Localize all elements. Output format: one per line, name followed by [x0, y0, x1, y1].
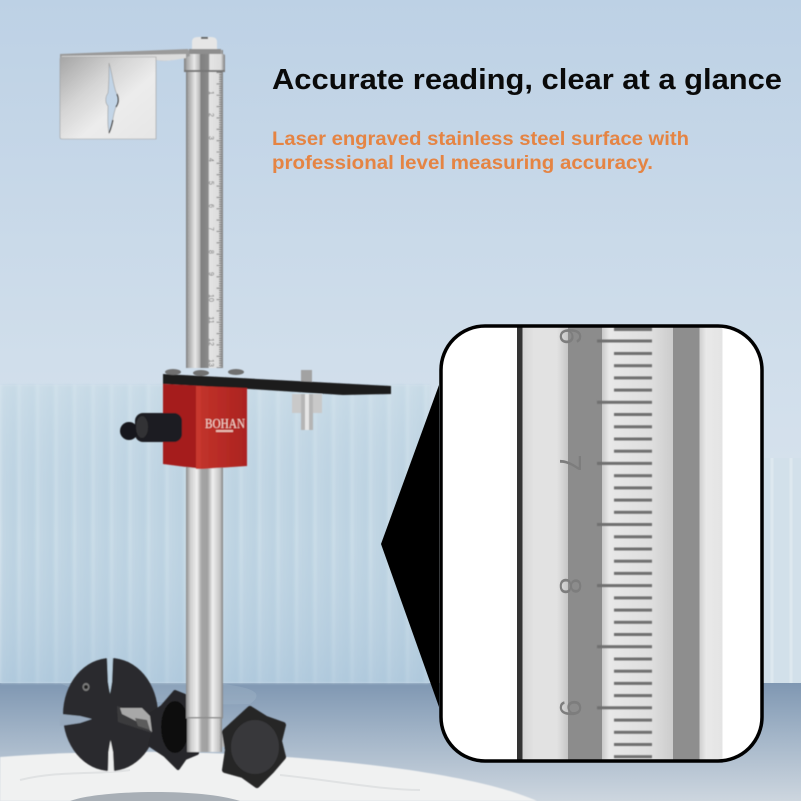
rear star knob [148, 692, 198, 768]
lower pole [186, 466, 223, 752]
disc mount [60, 657, 158, 772]
engraved scale on the pole: 8 [207, 250, 214, 254]
ruler ticks [597, 327, 652, 758]
threaded arm [117, 706, 152, 733]
orange description text: professional level measuring accuracy. [272, 153, 653, 174]
engraved scale on the pole: 7 [207, 227, 214, 231]
ruler digits [560, 329, 581, 715]
red sliding block [163, 384, 247, 469]
callout pointer [381, 385, 439, 707]
ruler digits: 7 [553, 454, 588, 472]
brand mark: BOHAN [205, 416, 245, 431]
orange description text [272, 129, 689, 174]
screw [206, 732, 230, 747]
engraved scale on the pole: 5 [207, 181, 214, 185]
engraved scale on the pole: 6 [207, 204, 214, 208]
marble table [0, 752, 537, 801]
stud under bracket [292, 370, 322, 430]
engraved scale on the pole: 4 [207, 158, 214, 162]
magnified ruler [517, 326, 722, 761]
engraved scale on the pole: 1 [207, 91, 214, 95]
zoom callout panel [441, 326, 762, 761]
engraved scale on the pole [207, 72, 220, 368]
engraved scale on the pole: 12 [207, 338, 214, 346]
black bracket arm [163, 369, 391, 395]
title: Accurate reading, clear at a glance [272, 64, 782, 96]
engraved scale on the pole: 2 [207, 113, 214, 117]
orange description text: Laser engraved stainless steel surface with [272, 129, 689, 150]
product: levelling pole [60, 37, 391, 785]
ruler digits: 9 [553, 699, 588, 717]
engraved scale on the pole: 9 [207, 272, 214, 276]
engraved scale on the pole: 11 [207, 316, 214, 324]
ruler digits: 8 [553, 577, 588, 595]
bent top plate [60, 49, 190, 139]
engraved scale on the pole: 3 [207, 136, 214, 140]
ruler digits: 6 [553, 327, 588, 345]
engraved scale on the pole: 10 [207, 294, 214, 302]
black side knob [120, 413, 182, 442]
engraved scale on the pole: 13 [207, 359, 214, 367]
top collar and upper pole [184, 37, 225, 368]
front star knob [225, 709, 283, 785]
